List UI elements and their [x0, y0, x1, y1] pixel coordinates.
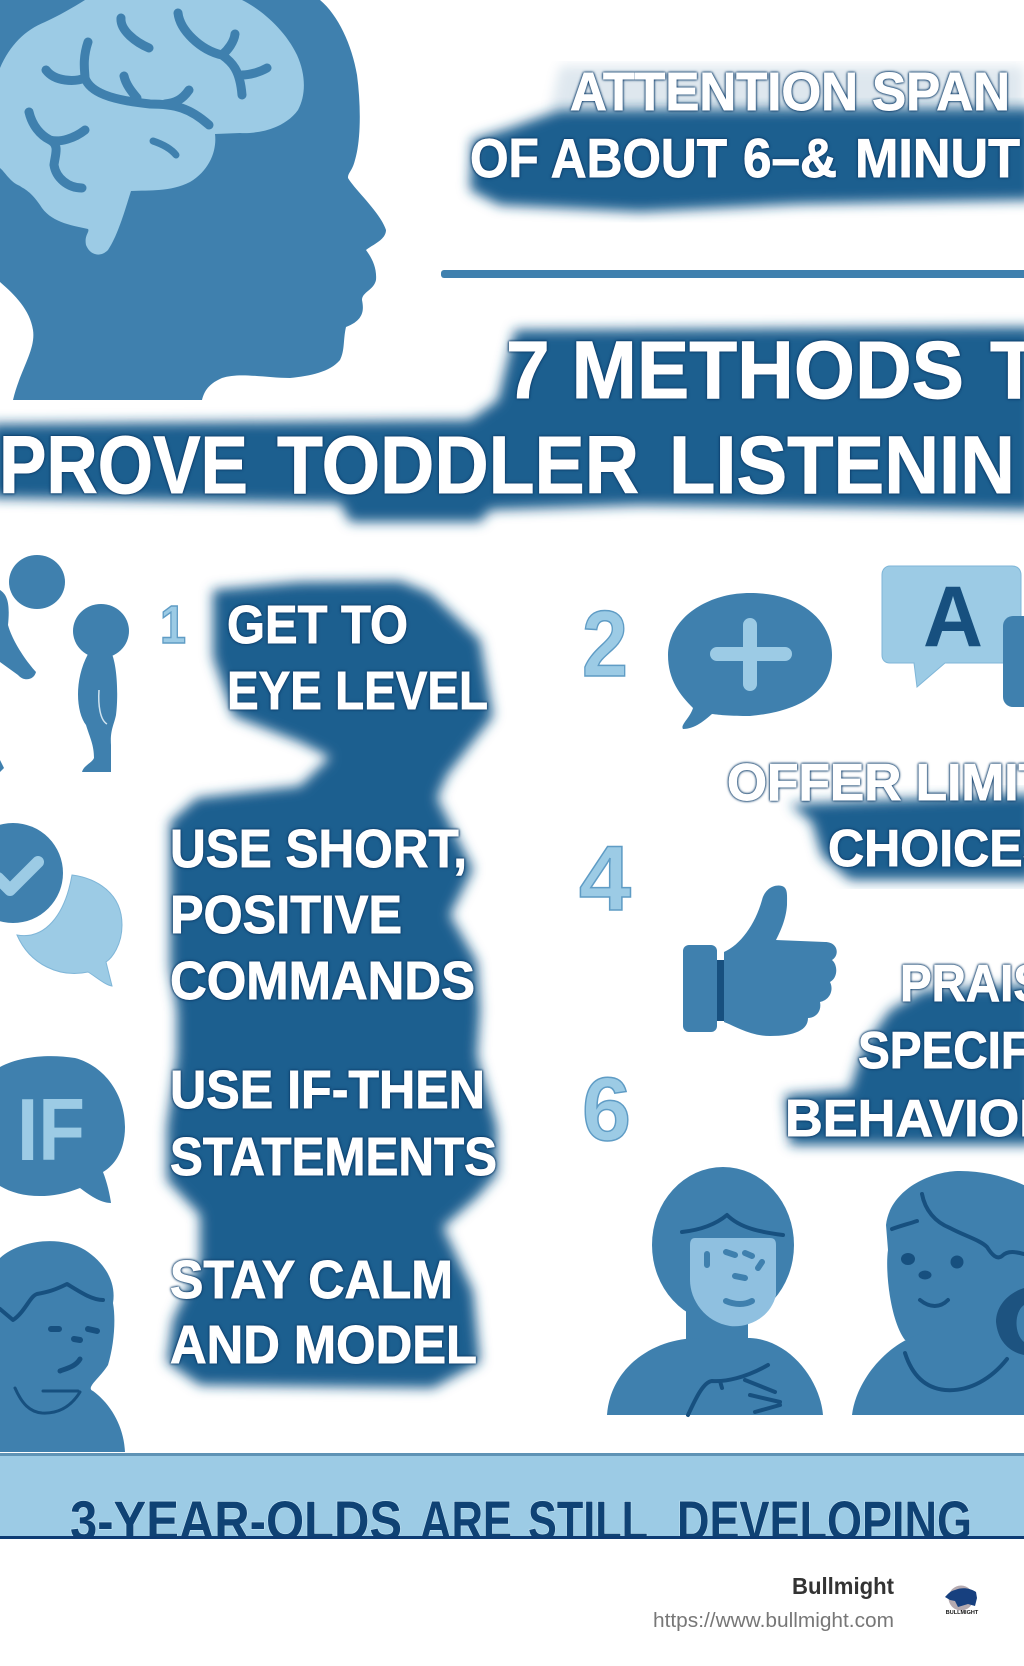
- text: attention span line 2: MINUT: [855, 127, 1020, 189]
- text: IF: IF: [17, 1080, 85, 1179]
- icon: bullmight logo: [945, 1586, 979, 1616]
- icon: woman with hand on chest: [607, 1167, 823, 1415]
- text: 3-year-olds are still developing: 3-YEAR-OLDS: [70, 1489, 402, 1552]
- icon: smiling parent: [852, 1171, 1024, 1415]
- text: 3-year-olds are still developing: STILL: [528, 1489, 648, 1552]
- panel: left column text blob: [160, 581, 497, 1388]
- method: stay calm and model: [170, 1250, 477, 1375]
- text: 3-year-olds are still developing: ARE: [420, 1489, 512, 1552]
- method: use if-then statements: STATEMENTS: [170, 1127, 497, 1187]
- method: stay calm and model: AND MODEL: [170, 1315, 477, 1375]
- number 4: 4: [579, 828, 631, 930]
- panel: bottom band: [0, 1453, 1024, 1539]
- panel: offer limited choices: [727, 754, 1024, 880]
- number 1: 1: [160, 595, 186, 655]
- text: attention span line 2: OF ABOUT: [470, 127, 727, 189]
- footer brand name: Bullmight: [792, 1573, 894, 1599]
- title line 2: PROVE: [0, 420, 248, 511]
- title line 2: [0, 420, 1015, 511]
- icon: thumbs up: [683, 886, 837, 1036]
- icon: child head with brain: [0, 0, 386, 400]
- title banner: [0, 325, 1024, 522]
- icon: boy face: [0, 1241, 125, 1452]
- method: stay calm and model: STAY CALM: [170, 1250, 453, 1310]
- method: use short positive commands: USE SHORT,: [170, 819, 467, 879]
- method: get to eye level: [227, 595, 488, 721]
- title line 1: 7 METHODS: [506, 325, 964, 416]
- method: use if-then statements: [170, 1060, 497, 1187]
- icon: if speech bubble: [0, 1056, 125, 1203]
- icon: adult and child at eye level: [0, 555, 129, 772]
- panel: attention span banner: [470, 62, 1024, 212]
- footer url: https://www.bullmight.com: [653, 1610, 894, 1632]
- panel: praise specific behavior: [785, 955, 1024, 1148]
- letter A: A: [923, 569, 983, 665]
- method: use short positive commands: COMMANDS: [170, 951, 475, 1011]
- icon: bullmight logo: BULLMIGHT: [946, 1610, 979, 1616]
- method: get to eye level: GET TO: [227, 595, 408, 655]
- method: use short positive commands: POSITIVE: [170, 885, 402, 945]
- icon: letter A bubble: [882, 566, 1024, 707]
- method: use short positive commands: [170, 819, 475, 1011]
- number 2: 2: [582, 591, 628, 696]
- number 6: 6: [582, 1060, 631, 1160]
- text: attention span line 2: [470, 127, 1020, 189]
- method: use if-then statements: USE IF-THEN: [170, 1060, 485, 1120]
- divider line: [441, 270, 1024, 278]
- text: attention span line 2: 6–&: [743, 127, 837, 189]
- text: attention span line 1: ATTENTION SPAN: [570, 62, 1010, 122]
- method: get to eye level: EYE LEVEL: [227, 661, 488, 721]
- icon: plus speech bubble: [668, 593, 832, 729]
- icon: check bubble and speech bubble: [0, 823, 122, 986]
- text: 3-year-olds are still developing: [70, 1500, 970, 1536]
- title line 2: TODDLER: [277, 420, 639, 511]
